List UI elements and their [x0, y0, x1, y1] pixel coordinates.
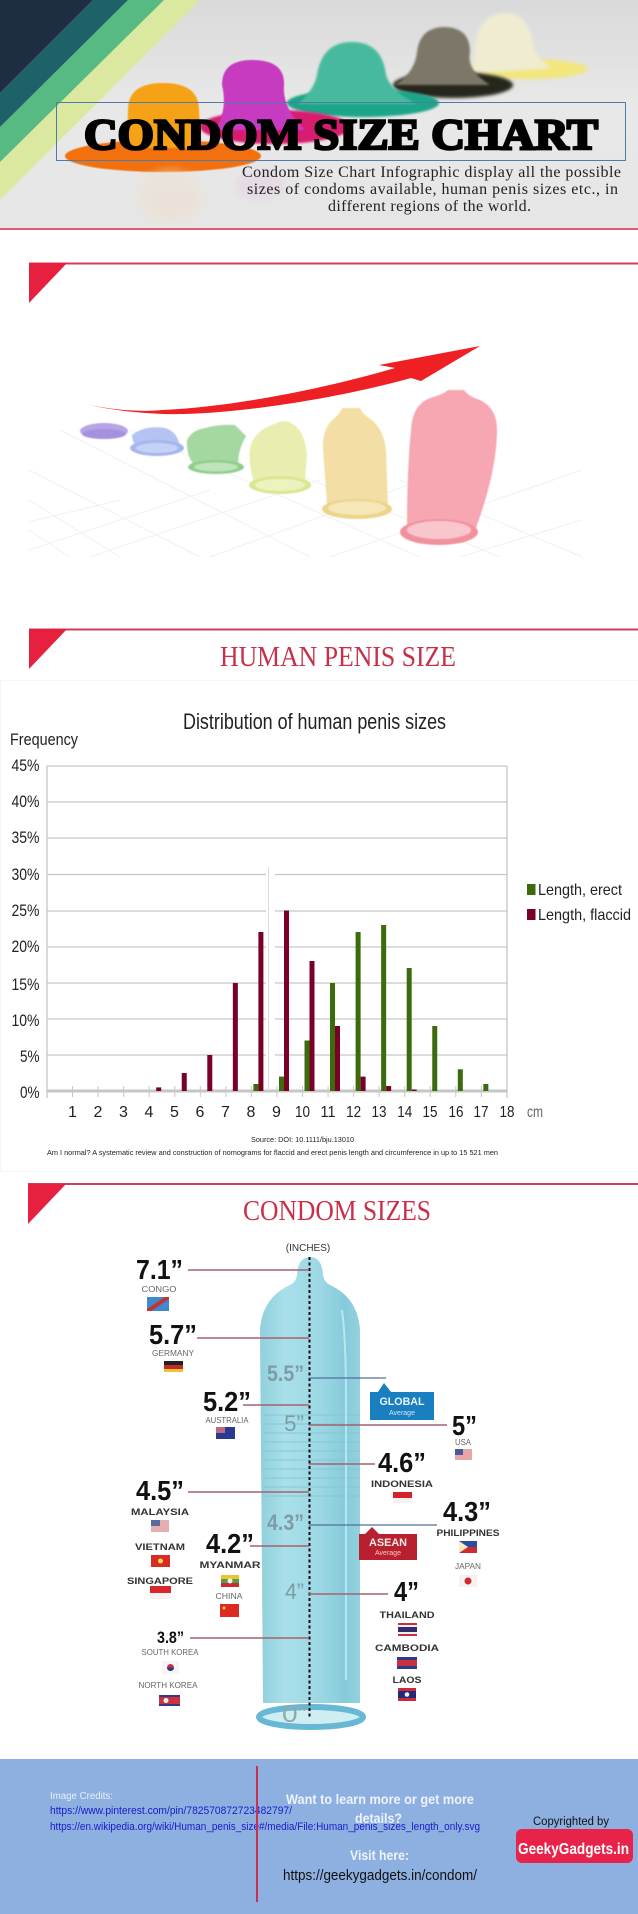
x axis labels — [68, 1104, 515, 1121]
section header: condom sizes — [28, 1183, 638, 1227]
entry: Congo 7.1 — [136, 1254, 183, 1311]
source note — [47, 1135, 498, 1157]
pink condom — [400, 390, 497, 545]
image credits — [50, 1791, 480, 1833]
subtitle — [242, 164, 621, 215]
entry: USA 5 — [452, 1410, 477, 1460]
footer divider — [256, 1766, 258, 1902]
callout: global average — [370, 1383, 434, 1420]
dotted centre axis — [308, 1257, 310, 1718]
y axis title: Frequency — [10, 730, 78, 749]
condom illustration — [259, 1257, 363, 1727]
entry: Philippines, Japan 4.3: 4.3” — [443, 1496, 491, 1527]
y axis labels: 45% — [12, 756, 40, 775]
blue condom — [130, 427, 184, 456]
entry: Congo 7.1: CONGO — [142, 1285, 176, 1294]
call to action: https://geekygadgets.in/condom/ — [283, 1867, 478, 1884]
entry: South Korea, North Korea 3.8: 3.8” — [157, 1628, 184, 1647]
image credits: https://en.wikipedia.org/wiki/Human_penis_size#/media/File:Human_penis_sizes_length_only.svg — [50, 1821, 480, 1833]
entry: Philippines, Japan 4.3 — [436, 1496, 500, 1587]
perspective floor grid — [29, 430, 582, 557]
panel: distribution chart — [0, 680, 638, 1172]
entry: South Korea, North Korea 3.8: SOUTH KOREA — [142, 1648, 199, 1657]
panel: growing condoms image — [29, 346, 582, 557]
entry: Germany 5.7: 5.7” — [149, 1319, 197, 1350]
source note: Source: DOI: 10.1111/bju.13010 — [251, 1135, 354, 1144]
erect length bars — [253, 925, 488, 1091]
x axis labels: 7 — [221, 1104, 230, 1121]
panel: footer — [0, 1759, 638, 1914]
scale marks on condom: 0” — [282, 1701, 307, 1728]
yellow-green condom — [249, 421, 311, 494]
entry: South Korea, North Korea 3.8 — [138, 1628, 199, 1706]
white gap mark — [266, 867, 275, 1091]
entry: Thailand, Cambodia, Laos 4: THAILAND — [380, 1610, 435, 1620]
x axis labels: 14 — [397, 1104, 412, 1121]
entry: Germany 5.7: GERMANY — [152, 1349, 195, 1358]
x axis labels: 1 — [68, 1104, 77, 1121]
panel: hero banner — [0, 0, 638, 230]
average lines — [309, 1378, 437, 1525]
x axis labels: 2 — [94, 1104, 103, 1121]
heading: CONDOM SIZES — [243, 1196, 431, 1227]
green condom — [187, 425, 246, 474]
entry: Australia 5.2: AUSTRALIA — [206, 1416, 249, 1425]
heading: HUMAN PENIS SIZE — [220, 642, 456, 673]
entry: Malaysia, Vietnam, Singapore 4.5 — [127, 1475, 193, 1599]
y axis labels: 30% — [12, 865, 40, 884]
entry: Malaysia, Vietnam, Singapore 4.5: 4.5” — [136, 1475, 184, 1506]
entry: Thailand, Cambodia, Laos 4 — [375, 1576, 440, 1701]
call to action: Want to learn more or get more — [286, 1791, 474, 1807]
y axis labels: 25% — [12, 901, 40, 920]
call to action: Visit here: — [350, 1847, 409, 1863]
scale marks on condom: 4.3” — [267, 1510, 304, 1535]
callout: global average: Average — [389, 1410, 415, 1417]
flaccid length bars — [156, 910, 417, 1091]
photo: row of coloured condoms — [65, 13, 588, 224]
y axis labels: 20% — [12, 937, 40, 956]
subtitle: Condom Size Chart Infographic display all the possible — [242, 164, 621, 181]
x axis labels: 13 — [372, 1104, 387, 1121]
source note: Am I normal? A systematic review and construction of nomograms for flaccid and erect penis length and circumference in up to 15 521 men — [47, 1148, 498, 1157]
y axis labels: 10% — [12, 1011, 40, 1030]
x axis labels: 17 — [474, 1104, 489, 1121]
legend: Length, erect — [538, 882, 622, 899]
subtitle: different regions of the world. — [328, 198, 531, 215]
diagonal corner stripes — [0, 0, 200, 200]
image credits: Image Credits: — [50, 1791, 113, 1802]
entry: USA 5: 5” — [452, 1410, 477, 1441]
callout: ASEAN average: Average — [375, 1550, 401, 1557]
entry: Thailand, Cambodia, Laos 4: 4” — [394, 1576, 419, 1607]
entry: Myanmar, China 4.2: MYANMAR — [200, 1560, 261, 1570]
scale marks on condom: 5.5” — [267, 1361, 304, 1386]
x axis labels: 15 — [422, 1104, 438, 1121]
scale marks on condom: 5” — [284, 1411, 304, 1436]
x axis labels: 18 — [500, 1104, 515, 1121]
copyright badge — [516, 1816, 633, 1863]
entry: Australia 5.2 — [203, 1386, 251, 1439]
entry: Malaysia, Vietnam, Singapore 4.5: SINGAPORE — [127, 1576, 193, 1586]
entry: Malaysia, Vietnam, Singapore 4.5: MALAYSIA — [131, 1507, 190, 1517]
red rising arrow — [89, 346, 480, 414]
entry: USA 5: USA — [455, 1438, 472, 1447]
copyright badge: Copyrighted by — [533, 1816, 609, 1828]
entry: Myanmar, China 4.2 — [200, 1528, 261, 1617]
scale marks on condom: 4” — [285, 1579, 304, 1604]
entry: South Korea, North Korea 3.8: NORTH KOREA — [138, 1681, 198, 1690]
section header marker 1 — [29, 262, 638, 303]
x axis labels: 10 — [295, 1104, 310, 1121]
scale marks on condom — [267, 1361, 307, 1728]
title frame — [56, 102, 626, 160]
x axis labels: 8 — [247, 1104, 256, 1121]
image credits: https://www.pinterest.com/pin/782570872723482797/ — [50, 1805, 293, 1817]
tan condom — [322, 408, 392, 519]
x axis labels: 11 — [320, 1104, 336, 1121]
entry: Australia 5.2: 5.2” — [203, 1386, 251, 1417]
section header: human penis size — [29, 628, 638, 673]
y axis labels — [12, 756, 40, 1102]
purple condom — [80, 423, 128, 439]
y axis labels: 35% — [12, 828, 40, 847]
entry: Congo 7.1: 7.1” — [136, 1254, 183, 1285]
entry: Indonesia 4.6 — [371, 1447, 434, 1503]
x axis labels: 16 — [448, 1104, 464, 1121]
x axis labels: 3 — [119, 1104, 128, 1121]
x axis labels: 9 — [272, 1104, 281, 1121]
callout: global average: GLOBAL — [380, 1396, 425, 1408]
legend — [527, 882, 631, 924]
x axis labels: 12 — [346, 1104, 361, 1121]
y axis labels: 5% — [20, 1047, 40, 1066]
title: CONDOM SIZE CHART — [84, 112, 598, 159]
entry: Philippines, Japan 4.3: JAPAN — [455, 1562, 481, 1571]
panel: condom length by country — [127, 1243, 500, 1728]
gridlines and frame — [47, 766, 507, 1098]
hero bottom rule — [0, 228, 638, 230]
x axis unit: cm — [527, 1104, 543, 1121]
call to action — [283, 1791, 478, 1884]
y axis labels: 15% — [12, 975, 40, 994]
entry: Indonesia 4.6: INDONESIA — [371, 1479, 434, 1489]
chart title: Distribution of human penis sizes — [183, 709, 446, 734]
callout: ASEAN average — [359, 1527, 417, 1560]
entry: Philippines, Japan 4.3: PHILIPPINES — [436, 1528, 500, 1538]
entry: Indonesia 4.6: 4.6” — [378, 1447, 426, 1478]
x axis labels: 6 — [196, 1104, 205, 1121]
entry: Thailand, Cambodia, Laos 4: LAOS — [392, 1675, 422, 1685]
x axis labels: 5 — [170, 1104, 179, 1121]
axis unit label: (INCHES) — [286, 1243, 330, 1254]
entry: Thailand, Cambodia, Laos 4: CAMBODIA — [375, 1643, 440, 1653]
y axis labels: 0% — [20, 1083, 40, 1102]
entry: Myanmar, China 4.2: CHINA — [216, 1592, 243, 1601]
hero photo background — [0, 0, 638, 229]
entry: Malaysia, Vietnam, Singapore 4.5: VIETNAM — [135, 1542, 185, 1552]
entry: Myanmar, China 4.2: 4.2” — [206, 1528, 254, 1559]
entry: Germany 5.7 — [149, 1319, 197, 1372]
y axis labels: 40% — [12, 792, 40, 811]
subtitle: sizes of condoms available, human penis sizes etc., in — [247, 181, 618, 198]
call to action: details? — [355, 1810, 402, 1826]
callout: ASEAN average: ASEAN — [369, 1537, 407, 1549]
leader lines — [188, 1270, 447, 1638]
x axis labels: 4 — [145, 1104, 154, 1121]
